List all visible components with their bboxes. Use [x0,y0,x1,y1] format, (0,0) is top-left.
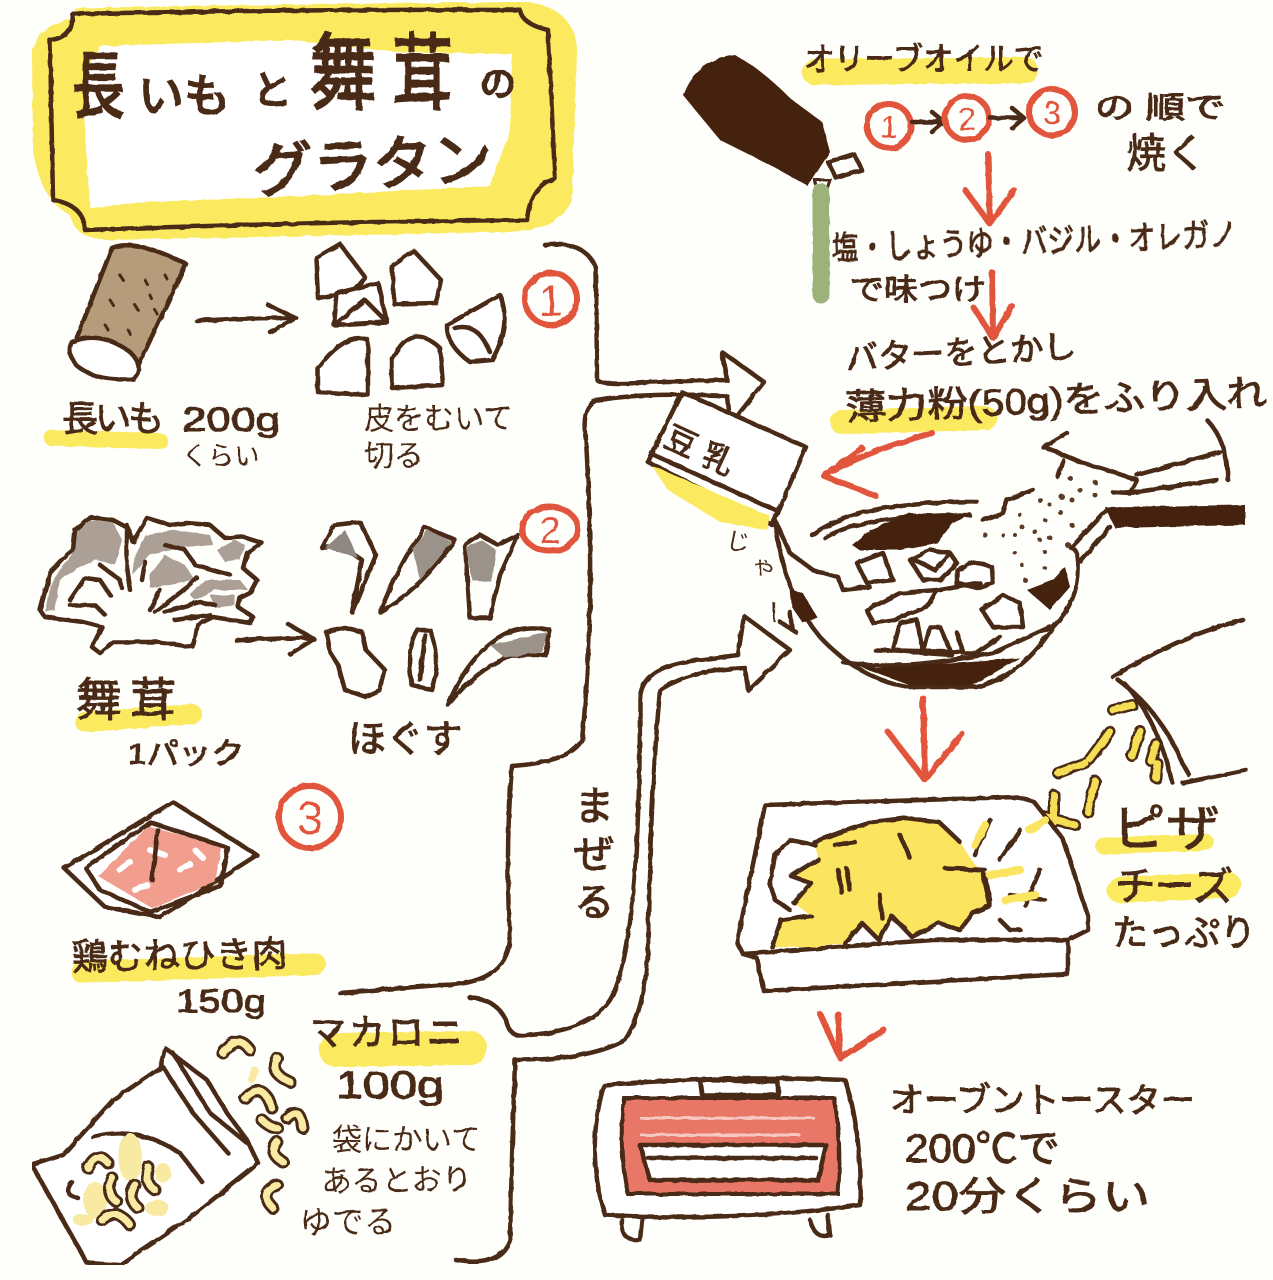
order sequence: 1 [880,109,898,145]
ingredient 1: nagaimo: くらい [182,441,260,471]
label: chicken: 鶏むねひき肉 [71,933,288,978]
step 3 marker: 3 [297,792,323,844]
soy milk carton [648,392,806,530]
icon: chicken tray [64,802,257,917]
highlight [336,1048,470,1050]
butter flour [842,418,985,422]
olive oil step: バターをとかし [844,328,1077,377]
cheese label: チーズ [1115,865,1233,909]
oven instruction: 20分くらい [905,1175,1150,1219]
cut instruction: 皮をむいて [364,403,513,436]
gratin dish [737,797,1088,991]
sizzle text: ー [759,600,786,624]
label: mix: る [574,881,614,925]
highlight [85,714,192,722]
icon: nagaimo [70,245,186,379]
olive oil step: 薄力粉(50g)をふり入れ [845,372,1268,428]
frying pan [724,420,1245,687]
highlight [82,964,315,972]
highlight [815,70,1025,72]
step 3 marker [279,786,341,848]
highlight [52,438,160,441]
icon: macaroni bag [32,1048,258,1265]
title text: 舞 [310,27,376,120]
label: nagaimo amount: 長いも [62,398,164,439]
label: mix: ぜ [574,833,614,877]
icon: maitake [40,517,262,653]
instruction: 袋にかいて [332,1124,481,1157]
ingredient 4: macaroni: 100g [336,1065,444,1107]
ingredient 2: maitake: 1パック [128,738,244,771]
red arrow [824,433,932,496]
oven instruction [890,1082,1195,1219]
label: mix: ま [574,785,614,829]
order sequence: 2 [958,101,976,137]
arrow [237,624,314,654]
order sequence: 3 [1043,95,1061,131]
arrow [197,305,296,332]
title text [72,27,516,205]
order sequence [867,89,1075,148]
ingredient 1: nagaimo [52,244,577,473]
step 2 marker [522,507,578,552]
olive oil step: 焼く [1126,132,1206,176]
flour [982,476,1098,582]
arrow [888,698,962,780]
title text: 茸 [392,28,453,120]
title text: グラタン [251,127,494,205]
step 2 marker: 2 [539,510,561,552]
step 1 marker [525,273,577,326]
sizzle text: ゃ [748,550,780,584]
ingredient 1: nagaimo: 200g [182,401,280,439]
arrow [965,154,1014,224]
pan contents [857,550,1023,655]
step 1 marker: 1 [539,277,563,326]
cheese label: ピザ [1112,801,1220,857]
toaster oven [595,1078,860,1240]
ingredient 3: chicken: 150g [176,983,266,1019]
sizzle text: じ [724,527,752,558]
ingredient 4: macaroni: あるとおり [322,1163,472,1199]
label: macaroni: マカロニ [310,1012,466,1053]
icon: olive oil bottle [683,55,862,295]
title text: 長 [72,48,124,128]
title text: と [252,69,292,113]
icon: falling macaroni [223,1042,303,1208]
label: olive oil: オリーブオイルで [804,41,1044,77]
cheese bag [1027,620,1246,856]
oven instruction: 200℃で [905,1127,1060,1171]
title text: の [480,63,516,104]
cheese label [1104,801,1256,953]
label: mix [574,785,614,925]
instruction: fry in order: の 順で [1095,92,1225,125]
arrow [974,272,1012,338]
ingredient 4: macaroni [32,1012,481,1265]
icon: torn maitake [322,522,550,705]
instruction: ほぐす [348,719,462,761]
title frame [32,2,577,240]
olive oil step [683,41,1268,428]
ingredient 2: maitake [40,507,578,771]
ingredient 4: macaroni: ゆでる [300,1204,396,1240]
olive oil step: で味つけ [850,274,986,307]
arrow [820,1014,884,1058]
oven instruction: オーブントースター [890,1082,1195,1120]
title text: いも [138,70,230,122]
mix brackets [340,244,790,1262]
sizzle text [724,527,796,632]
cheese label: たっぷり [1112,912,1256,953]
icon: cut nagaimo [316,244,504,395]
soy milk carton: 豆 乳 [659,419,740,482]
ingredient 1: nagaimo: 切る [364,440,424,473]
label: maitake: 舞茸 [76,674,184,726]
ingredient 3: chicken [64,786,341,1019]
flour container [983,420,1228,520]
